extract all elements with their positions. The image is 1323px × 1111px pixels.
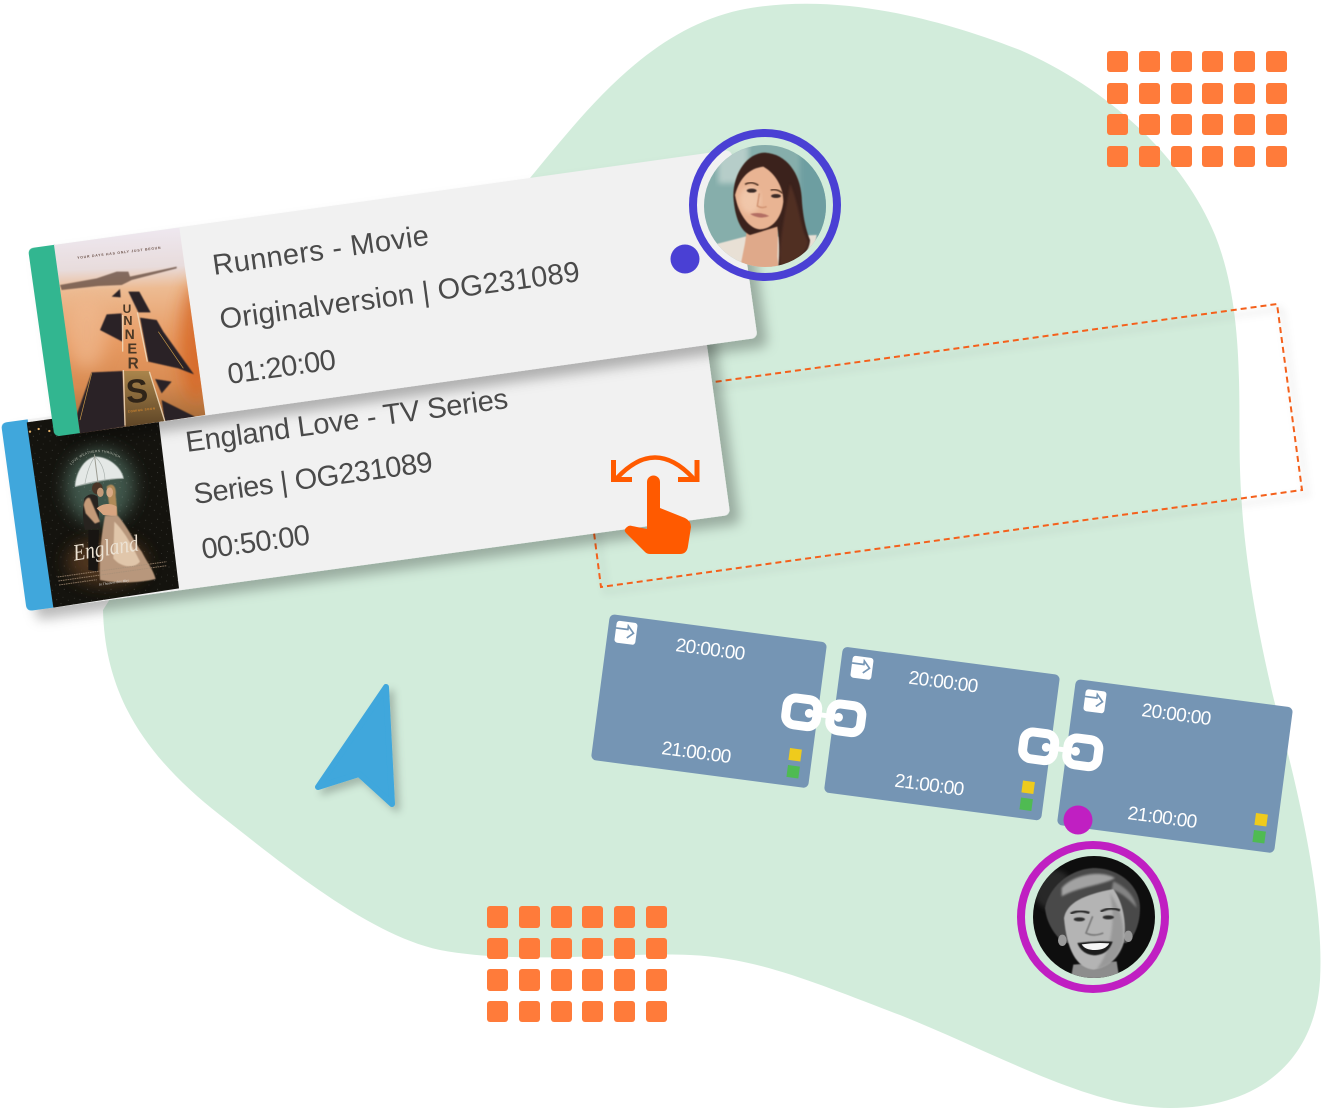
duration: 00:50:00: 00:50:00 [200, 519, 312, 566]
icon: chain link between blocks 1 and 2 [785, 697, 863, 734]
card 2 body [1, 327, 730, 611]
timeline block 2 [824, 646, 1060, 821]
poster: Runners: N [123, 314, 132, 328]
title: Runners: Runners - Movie [211, 220, 431, 282]
poster: England [26, 418, 179, 608]
subtitle: Series code: Series | OG231089 [192, 447, 435, 511]
block 2 end time: 21:00:00 [893, 771, 965, 801]
block 2 start time: 20:00:00 [907, 668, 979, 698]
card 1 body [28, 150, 758, 437]
dashed drop target outline [577, 304, 1302, 587]
poster: Runners: U [123, 302, 131, 316]
timeline block 3 [1057, 679, 1293, 853]
icon: orange touch rotate hand [611, 458, 700, 554]
title: England Love: England Love - TV Series [184, 383, 510, 459]
poster: England: England [70, 531, 141, 567]
poster: Runners: COMING SOON [128, 406, 155, 414]
status dot: indigo [670, 244, 700, 274]
poster: England: LOVE WEATHERS THROUGH IT [70, 450, 120, 465]
poster: England: In Theaters this May [98, 578, 130, 587]
subtitle: Originalversion code: Originalversion | OG231089 [218, 256, 582, 336]
icon: block 2 arrow badge [850, 656, 874, 680]
timeline block 1 [591, 614, 827, 788]
icon: chain link between blocks 2 and 3 [1022, 731, 1100, 768]
orange dot grid top right [1107, 51, 1287, 167]
panel: England Love card [2, 344, 746, 626]
poster: Runners: E [127, 342, 137, 358]
orange dot grid bottom [487, 906, 667, 1022]
duration: 01:20:00: 01:20:00 [226, 344, 338, 391]
block 3 end time: 21:00:00 [1126, 803, 1198, 833]
poster: Runners: YOUR DAYS HAS ONLY JUST BEGUN [77, 246, 161, 260]
poster: Runners: N [125, 326, 135, 342]
block 1 end time: 21:00:00 [660, 738, 732, 768]
icon: block 3 arrow badge [1083, 689, 1107, 714]
status dot: purple [1064, 806, 1092, 834]
avatar: woman with indigo ring [693, 133, 837, 277]
photo: man portrait [1033, 856, 1155, 978]
block 3 status squares [1252, 813, 1268, 843]
poster: Runners [54, 228, 206, 434]
icon: block 1 arrow badge [614, 620, 638, 645]
photo: woman portrait [704, 145, 826, 267]
panel: Runners card [28, 150, 758, 438]
block 1 start time: 20:00:00 [674, 635, 746, 665]
icon: blue cursor arrow [318, 687, 392, 804]
avatar: man with purple ring [1021, 845, 1165, 989]
block 3 start time: 20:00:00 [1140, 700, 1212, 730]
block 2 status squares [1019, 780, 1035, 811]
poster: Runners: S [125, 373, 149, 411]
poster: Runners: R [128, 356, 139, 373]
block 1 status squares [786, 748, 802, 778]
